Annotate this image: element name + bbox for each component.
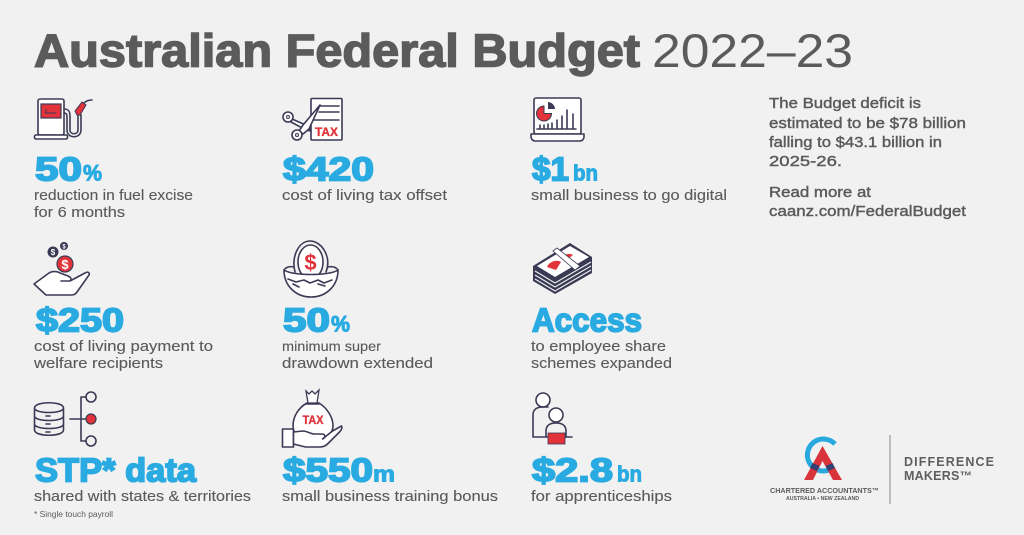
panel: apprenticeships <box>531 393 672 505</box>
description: to employee share <box>531 339 666 355</box>
description: small business training bonus <box>282 489 498 505</box>
panel: small business digital <box>531 98 727 204</box>
description: cost of living payment to <box>34 339 213 355</box>
icon: scissors and tax form <box>283 98 342 140</box>
panel: welfare payment <box>33 242 213 372</box>
icon: hand with coins: $ <box>61 257 69 272</box>
footnote: * Single touch payroll <box>34 509 113 519</box>
panel: budget deficit note: caanz.com/FederalBudget <box>769 204 966 220</box>
stat: 50%: 50 <box>35 150 82 188</box>
panel: STP data <box>34 392 251 519</box>
description: minimum super <box>282 338 381 354</box>
panel: training bonus <box>282 390 498 505</box>
stat: $1bn <box>532 150 598 188</box>
tagline: Difference Makers: DIFFERENCE <box>904 455 994 469</box>
icon: tax bag in hand <box>282 390 342 447</box>
panel: budget deficit note: 2025-26. <box>769 154 842 170</box>
panel: employee share schemes <box>531 243 672 372</box>
icon: tax bag in hand: TAX <box>302 415 324 427</box>
title: Australian Federal Budget <box>34 24 640 76</box>
stat: $1bn: bn <box>573 160 598 186</box>
icon: database network <box>34 392 96 446</box>
icon: fuel pump <box>34 99 92 139</box>
description: cost of living tax offset <box>282 188 447 204</box>
description: for 6 months <box>34 205 125 221</box>
icon: hand with coins: $ <box>62 244 66 250</box>
stat: $2.8 bn <box>532 452 642 488</box>
stat: $550m: $550 <box>283 452 373 488</box>
panel: budget deficit note: The Budget deficit is <box>769 96 921 112</box>
description: welfare recipients <box>33 356 163 372</box>
icon: nest egg: $ <box>304 250 317 275</box>
stat: $250: $250 <box>36 302 124 338</box>
stat: $1bn: $1 <box>532 150 569 188</box>
description: reduction in fuel excise <box>34 188 193 204</box>
icon: stack of money <box>533 243 592 294</box>
stat: STP data: STP* data <box>35 452 197 488</box>
panel: budget deficit note: estimated to be $78 billion <box>769 116 966 132</box>
stat: $420: $420 <box>283 150 374 188</box>
icon: apprentice and mentor <box>533 393 572 444</box>
panel: super drawdown <box>282 241 433 372</box>
panel: budget deficit note: Read more at <box>769 185 871 201</box>
description: shared with states & territories <box>34 489 251 505</box>
stat: Access: Access <box>532 302 642 338</box>
tagline: Difference Makers: MAKERS™ <box>904 469 972 483</box>
description <box>33 339 213 372</box>
stat: 50% <box>283 302 350 338</box>
stat: 50%: % <box>83 160 102 186</box>
stat: 50% <box>35 150 102 188</box>
stat: 50%: 50 <box>283 302 330 338</box>
icon: scissors and tax form: TAX <box>315 127 338 139</box>
logo: Chartered Accountants <box>770 439 879 502</box>
stat: 50%: % <box>331 312 350 336</box>
icon: laptop with charts <box>531 98 584 141</box>
title: 2022–23 <box>652 24 853 77</box>
description: for apprenticeships <box>531 489 672 505</box>
tagline: Difference Makers <box>890 435 994 504</box>
stat: $550m: m <box>373 462 395 486</box>
title <box>34 24 853 77</box>
panel: tax offset <box>282 98 447 204</box>
stat: $2.8 bn: $2.8 <box>532 452 613 488</box>
description <box>34 188 193 221</box>
logo: Chartered Accountants: AUSTRALIA • NEW ZEALAND <box>786 496 859 502</box>
logo: Chartered Accountants: CHARTERED ACCOUNTANTS™ <box>770 486 879 495</box>
stat: $550m <box>283 452 395 488</box>
description <box>282 338 433 372</box>
description <box>531 339 672 372</box>
description: schemes expanded <box>531 356 672 372</box>
panel: fuel excise <box>34 99 193 221</box>
icon: hand with coins: $ <box>51 248 56 257</box>
panel: budget deficit note: falling to $43.1 billion in <box>769 135 942 151</box>
description: drawdown extended <box>282 356 433 372</box>
panel: budget deficit note <box>769 96 966 220</box>
stat: $2.8 bn: bn <box>617 462 642 486</box>
icon: nest egg <box>284 241 338 297</box>
icon: hand with coins <box>34 242 89 295</box>
description: small business to go digital <box>531 188 727 204</box>
